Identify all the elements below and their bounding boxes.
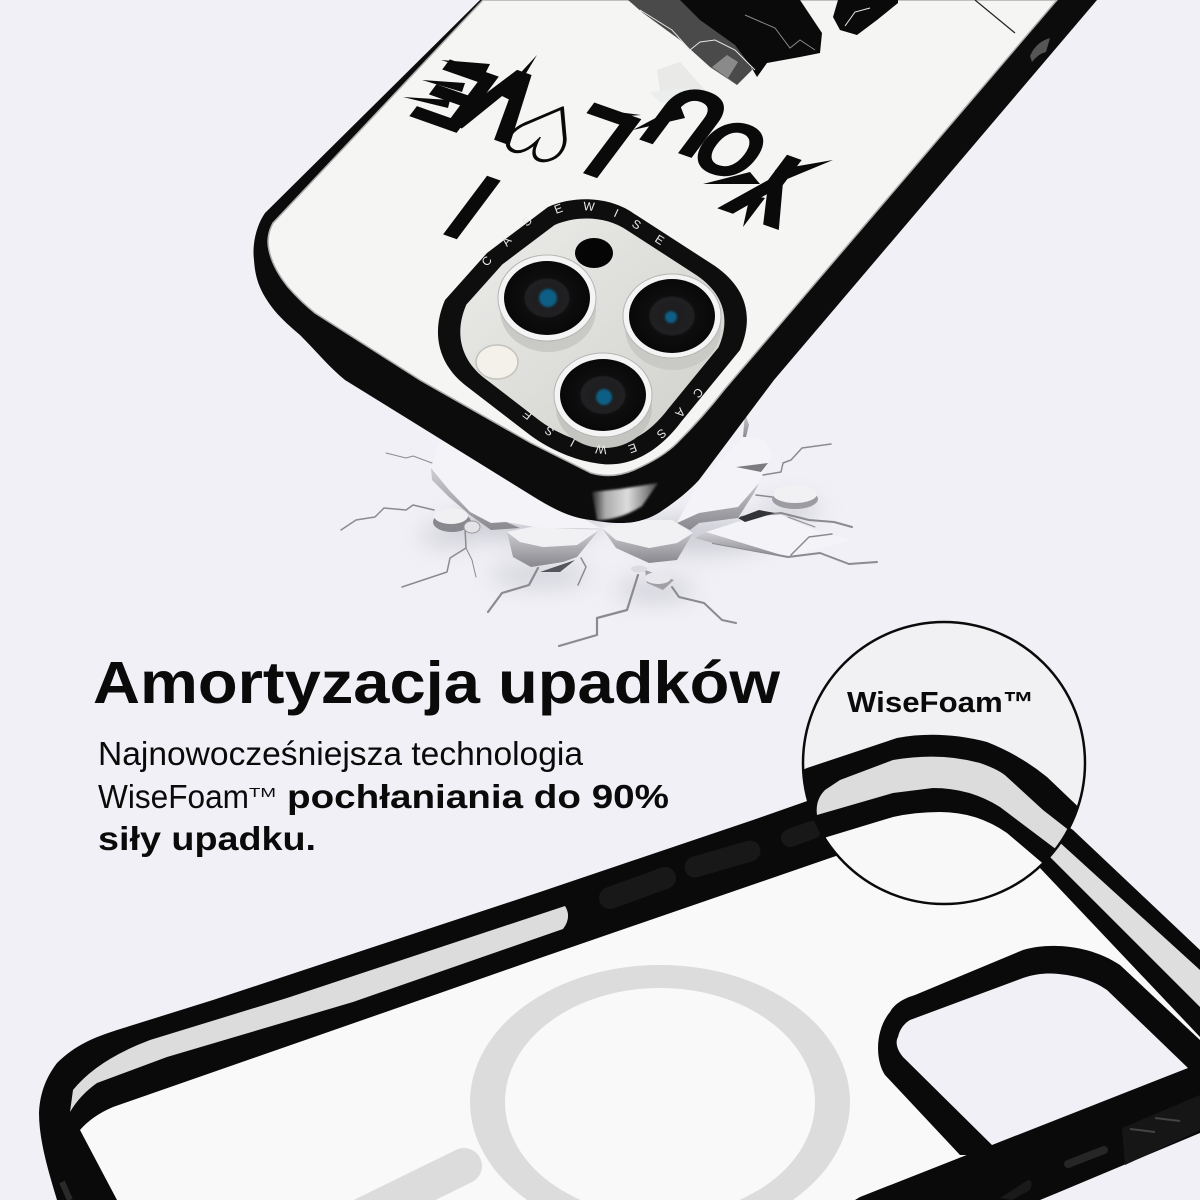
dark gap under slab — [738, 510, 775, 522]
thin cracks — [341, 444, 877, 646]
rose artwork — [628, 0, 1015, 103]
magsafe alignment bar — [362, 1166, 464, 1200]
graffiti lettering YOU LOVE: Y — [704, 128, 840, 248]
upper phone case — [253, 0, 1097, 523]
chrome corner reflection — [592, 483, 658, 520]
graffiti lettering YOU LOVE: U — [623, 65, 751, 175]
flash — [476, 345, 518, 379]
description: siły upadku. — [98, 820, 316, 857]
broken slab side faces — [431, 413, 788, 567]
camera plateau — [460, 219, 724, 445]
lens bottom — [554, 353, 652, 448]
charging port details — [1000, 1095, 1200, 1200]
grey foam strip right — [1033, 820, 1200, 1007]
magsafe ring — [470, 965, 850, 1200]
broken slab tops — [507, 520, 693, 548]
speaker slot left — [62, 1182, 70, 1200]
description: pochłaniania do 90% — [287, 778, 669, 815]
camera cut-out frame — [878, 946, 1200, 1155]
heading: Amortyzacja upadków — [93, 650, 780, 716]
case frame — [39, 770, 1200, 1200]
description — [98, 735, 669, 857]
lens right — [623, 274, 721, 370]
small rock right — [772, 485, 818, 509]
small rock centre — [631, 566, 674, 590]
lens top-left — [498, 255, 596, 352]
brand text bottom: CASEWISE — [520, 385, 706, 457]
raised slab surfaces — [431, 436, 850, 557]
description: Najnowocześniejsza technologia — [98, 735, 584, 772]
graffiti lettering YOU LOVE — [393, 41, 840, 248]
description: WiseFoam — [98, 778, 249, 815]
lower phone case — [39, 770, 1200, 1200]
graffiti lettering YOU LOVE: O — [675, 101, 787, 196]
bumper ring — [438, 199, 747, 464]
brand text top: CASEWISE — [479, 199, 667, 269]
small rock left — [433, 508, 480, 533]
graffiti lettering I: I — [425, 156, 520, 258]
camera bumper — [438, 199, 747, 464]
graffiti lettering YOU LOVE: L — [536, 84, 660, 196]
graffiti lettering YOU LOVE: ♡ — [484, 79, 608, 181]
side button glint — [1030, 38, 1050, 62]
microphone hole — [575, 238, 613, 268]
graffiti brush spikes — [403, 55, 833, 227]
dark slab triangle — [736, 463, 768, 472]
magnified case corner — [804, 734, 1077, 863]
volume buttons — [610, 830, 812, 898]
graffiti lettering YOU LOVE: V — [433, 43, 570, 163]
floor crack impact — [341, 413, 877, 646]
WiseFoam magnifier callout — [802, 620, 1086, 906]
magnifier outline — [803, 622, 1085, 904]
magnifier label: WiseFoam™ — [847, 687, 1034, 719]
description: TM — [249, 785, 276, 800]
grey foam strip left — [70, 906, 568, 1112]
glossy back panel — [268, 0, 1057, 475]
clear back panel — [80, 835, 1200, 1200]
soft floor shadows — [420, 498, 820, 600]
graffiti lettering YOU LOVE: E — [393, 41, 517, 150]
magnifier background — [803, 622, 1085, 904]
case black bumper — [253, 0, 1097, 523]
camera cut-out hole — [897, 973, 1188, 1145]
